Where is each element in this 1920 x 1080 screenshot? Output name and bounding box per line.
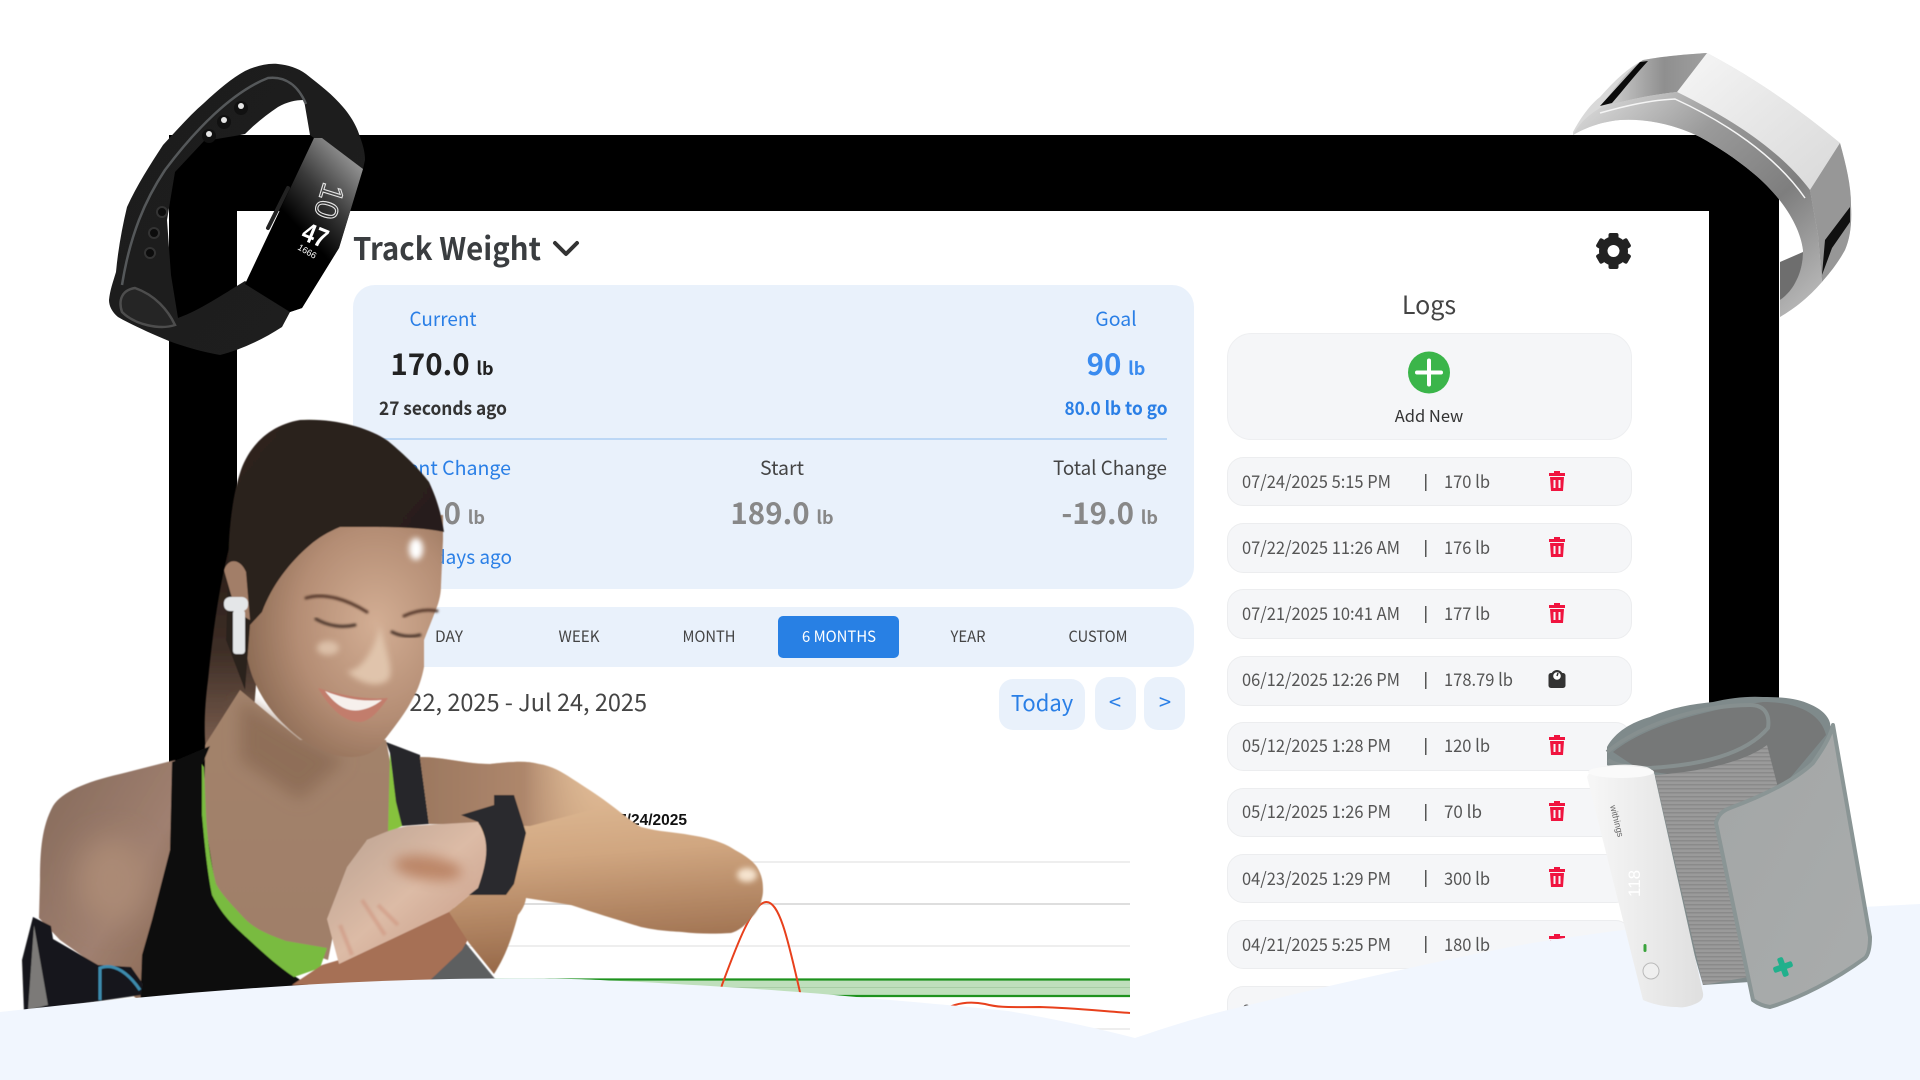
add new log card: Add New <box>1395 403 1463 427</box>
start weight <box>730 452 834 533</box>
ring black reflection <box>1600 61 1648 106</box>
goal weight: 80.0 lb to go <box>1064 395 1168 421</box>
hair <box>226 420 444 690</box>
clasp loop <box>121 288 175 327</box>
background wave <box>0 904 1920 1080</box>
icon: settings gear <box>1595 233 1632 269</box>
log row <box>1228 920 1632 968</box>
teeth <box>325 691 382 711</box>
closed eyes <box>316 619 420 636</box>
ring inner lower <box>1780 252 1803 300</box>
date buttons: > <box>1159 685 1171 717</box>
current weight: 170.0 lb <box>390 342 494 384</box>
lit bicep <box>78 838 146 922</box>
ring right reflection <box>1822 207 1850 275</box>
mouth <box>318 688 388 722</box>
cuff inner loop edge <box>1607 705 1768 768</box>
log row <box>1228 722 1632 770</box>
face <box>245 515 443 757</box>
icon: chevron <box>555 243 577 254</box>
log row <box>1228 854 1632 902</box>
start weight: Start <box>760 452 805 481</box>
band screen <box>245 138 363 312</box>
neck shadow <box>240 700 345 800</box>
log row <box>1228 524 1632 572</box>
ring left facet <box>1600 53 1707 108</box>
panel: range tabs: DAY <box>435 625 464 647</box>
date buttons <box>999 677 1185 730</box>
log row: 07/21/2025 10:41 AM <box>1242 601 1400 626</box>
goal weight: Goal <box>1095 303 1137 332</box>
log row <box>1228 590 1632 638</box>
ring top facet <box>1677 53 1840 190</box>
recent change <box>375 452 512 570</box>
green trim right <box>388 753 402 833</box>
eyebrows <box>306 596 437 616</box>
log row: 178.79 lb <box>1444 667 1513 692</box>
current weight: 27 seconds ago <box>379 395 507 421</box>
current weight <box>379 303 507 421</box>
total change: -19.0 lb <box>1061 491 1158 533</box>
goal weight: 90 lb <box>1087 342 1145 384</box>
ear <box>224 561 250 620</box>
total change: Total Change <box>1053 452 1167 481</box>
date buttons: Today <box>1011 686 1074 718</box>
recent change: Recent Change <box>375 452 511 481</box>
log row: 05/12/2025 1:26 PM <box>1242 799 1391 824</box>
log row: 120 lb <box>1444 733 1490 758</box>
icon: trash <box>1549 801 1565 821</box>
date range: Jan 22, 2025 - Jul 24, 2025 <box>364 684 647 718</box>
chart date label: 07/24/2025 <box>609 812 687 829</box>
band strap <box>109 64 365 355</box>
raised forearm <box>420 757 763 974</box>
neck and chest <box>204 690 402 960</box>
smartwatch <box>461 795 526 895</box>
log row <box>1228 458 1632 506</box>
monitor unit <box>1587 765 1703 1007</box>
weight line <box>718 902 803 1005</box>
log row: 04/21/2025 5:25 PM <box>1242 932 1391 957</box>
cuff inner back <box>1613 702 1826 790</box>
panel: range tabs: CUSTOM <box>1068 625 1128 647</box>
unit display: 118 <box>1625 870 1644 897</box>
ring right facet <box>1810 143 1851 282</box>
current weight: Current <box>410 303 477 332</box>
cheek highlight <box>317 641 339 655</box>
panel: range tabs: MONTH <box>682 625 736 647</box>
photo: smart ring <box>1573 53 1851 317</box>
band lower holes <box>145 207 167 258</box>
right strap <box>386 742 429 826</box>
ring bevel <box>1573 92 1822 317</box>
icon: scale <box>1548 670 1566 688</box>
icon: trash <box>1549 735 1565 755</box>
ponytail <box>205 530 262 752</box>
log row: 05/12/2025 1:28 PM <box>1242 733 1391 758</box>
icon: trash <box>1549 934 1565 954</box>
panel: range tabs: WEEK <box>558 625 600 647</box>
log row: 177 lb <box>1444 601 1490 626</box>
earbud <box>224 597 248 654</box>
recent change: -6.0 lb <box>406 491 485 533</box>
log row: 07/24/2025 5:15 PM <box>1242 469 1391 494</box>
unit top <box>1588 766 1654 778</box>
log row: 04/20/2025 9:10 AM <box>1242 998 1391 1023</box>
panel: range tabs: YEAR <box>950 625 986 647</box>
tablet frame <box>169 135 1779 1060</box>
log row: 07/22/2025 11:26 AM <box>1242 535 1400 560</box>
panel: weight summary <box>353 285 1194 589</box>
wrist and hand <box>327 822 490 964</box>
log row <box>1228 788 1632 836</box>
fingers <box>340 900 398 955</box>
lower fingers and hand <box>292 908 486 985</box>
log row: 176 lb <box>1444 535 1490 560</box>
band peg holes <box>202 101 248 143</box>
screen time <box>296 179 352 261</box>
icon: trash <box>1549 537 1565 557</box>
cuff front flap <box>1716 725 1870 1007</box>
panel: range tabs <box>353 607 1194 667</box>
palm <box>393 851 463 885</box>
log row: 170 lb <box>1444 469 1490 494</box>
gray bra lower <box>415 930 500 985</box>
status led <box>1644 944 1646 952</box>
cuff ribbed body <box>1655 745 1785 985</box>
ring outer shell <box>1573 53 1851 317</box>
elbow highlight <box>737 868 757 882</box>
chart: weight over time <box>420 812 1130 1029</box>
log row: 06/12/2025 12:26 PM <box>1242 667 1400 692</box>
brand text: withings <box>1608 803 1626 839</box>
strap edge highlight <box>122 78 306 285</box>
log row: 70 lb <box>1444 799 1482 824</box>
icon: trash <box>1549 867 1565 887</box>
screen time: 10 <box>307 179 352 224</box>
cuff back loop <box>1607 697 1870 985</box>
logs heading: Logs <box>1402 286 1456 322</box>
photo: fitness band <box>109 64 365 355</box>
upper arm shade <box>420 757 610 826</box>
log list <box>1228 458 1632 1034</box>
photo: blood pressure cuff <box>1587 697 1870 1007</box>
screen time: 47 <box>298 217 333 255</box>
date buttons: < <box>1109 685 1121 717</box>
log row <box>1228 656 1632 706</box>
icon: trash <box>1549 471 1565 491</box>
total change <box>1053 452 1167 533</box>
goal range band <box>480 980 1130 996</box>
recent change: 2 days ago <box>419 543 512 570</box>
photo: woman checking smartwatch <box>22 420 763 1012</box>
band peg highlights <box>206 103 244 137</box>
green trim <box>202 764 327 977</box>
goal weight <box>1064 303 1168 421</box>
log row: 180 lb <box>1444 932 1490 957</box>
left shoulder and arm <box>39 760 190 1010</box>
log row <box>1228 986 1632 1034</box>
panel: range tabs: 6 MONTHS <box>802 625 876 647</box>
log row: 300 lb <box>1444 866 1490 891</box>
ring highlight line <box>1600 99 1805 198</box>
forehead highlight <box>409 538 423 560</box>
start weight: 189.0 lb <box>730 491 834 533</box>
black tank top <box>140 746 330 1010</box>
log row: 04/23/2025 1:29 PM <box>1242 866 1391 891</box>
side button <box>268 188 288 228</box>
title: Track Weight: Track Weight <box>353 224 541 269</box>
icon: trash <box>1549 603 1565 623</box>
icon: add <box>1408 352 1450 394</box>
nose <box>347 625 390 684</box>
active tab <box>778 616 899 658</box>
cross mark <box>1770 954 1796 980</box>
screen time: 1666 <box>296 242 318 261</box>
add new log card <box>1228 334 1632 440</box>
power button <box>1643 963 1659 979</box>
armband <box>22 917 143 1012</box>
